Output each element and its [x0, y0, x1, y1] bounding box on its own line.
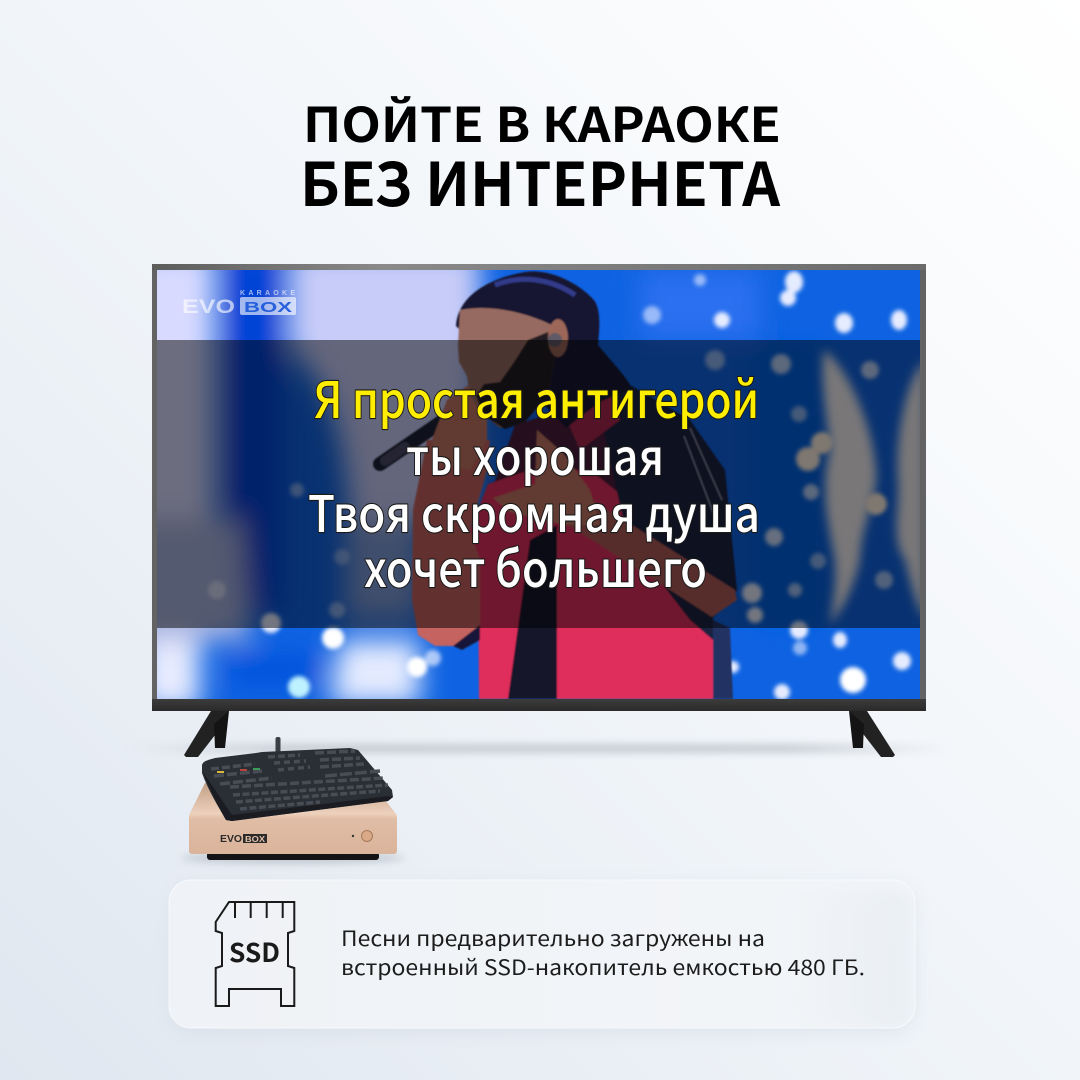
karaoke lyrics overlay band: [157, 340, 920, 628]
singer collar: [568, 396, 621, 448]
lyrics: ты хорошая: [406, 418, 664, 490]
karaoke logo: KARAOKE: [240, 290, 295, 297]
microphone: [372, 416, 441, 472]
panel card: [169, 880, 915, 1028]
sleeve stripes: [684, 428, 722, 520]
panel shadow: [172, 886, 914, 1032]
singer beard: [476, 332, 556, 429]
singer hands: [432, 384, 600, 525]
jacket center stripe: [508, 525, 557, 699]
tv frame: [152, 264, 926, 711]
karaoke logo: BOX: [244, 299, 292, 316]
ssd description: встроенный SSD-накопитель емкостью 480 ГБ.: [341, 952, 865, 982]
karaoke box with remote: [181, 737, 405, 864]
tv stand legs: [184, 711, 895, 757]
lyrics: [308, 361, 760, 602]
singer face: [458, 308, 556, 428]
bokeh lights: [208, 271, 911, 700]
box front: [189, 814, 397, 854]
lyrics: хочет большего: [364, 530, 707, 602]
singer: [380, 271, 737, 699]
box logo: [220, 834, 267, 845]
television: [130, 250, 926, 757]
antenna: [276, 737, 280, 753]
lyrics: Твоя скромная душа: [308, 475, 760, 547]
box shadow: [181, 852, 405, 864]
box power button: [352, 830, 372, 842]
karaoke logo: EVO: [182, 297, 235, 318]
tv screen with singer: [157, 270, 920, 699]
jacket lower edge: [713, 620, 733, 699]
singer jacket: [470, 470, 713, 699]
singer hair: [456, 271, 632, 428]
remote control: [202, 748, 393, 821]
ssd description: Песни предварительно загружены на: [341, 923, 765, 953]
singer torso: [494, 416, 618, 492]
box logo: EVO: [220, 834, 242, 845]
title: [300, 86, 781, 224]
stage light wings: [823, 350, 925, 625]
box top surface: [189, 783, 397, 815]
karaoke logo: [184, 290, 296, 315]
panel: ssd info: [169, 880, 915, 1032]
hair highlight: [495, 279, 575, 295]
icon: ssd card: SSD: [229, 933, 280, 970]
singer ear with monitor: [548, 319, 568, 357]
title: ПОЙТЕ В КАРАОКЕ: [303, 86, 781, 156]
icon: ssd card: [216, 902, 294, 1006]
title: БЕЗ ИНТЕРНЕТА: [300, 137, 781, 224]
box base: [207, 852, 379, 860]
lyrics: Я простая антигерой: [314, 361, 759, 433]
singer sleeve: [597, 386, 737, 640]
ssd description: [341, 923, 865, 982]
singer arms: [412, 440, 737, 650]
box logo: BOX: [245, 834, 265, 844]
floor shadow: [130, 744, 950, 753]
